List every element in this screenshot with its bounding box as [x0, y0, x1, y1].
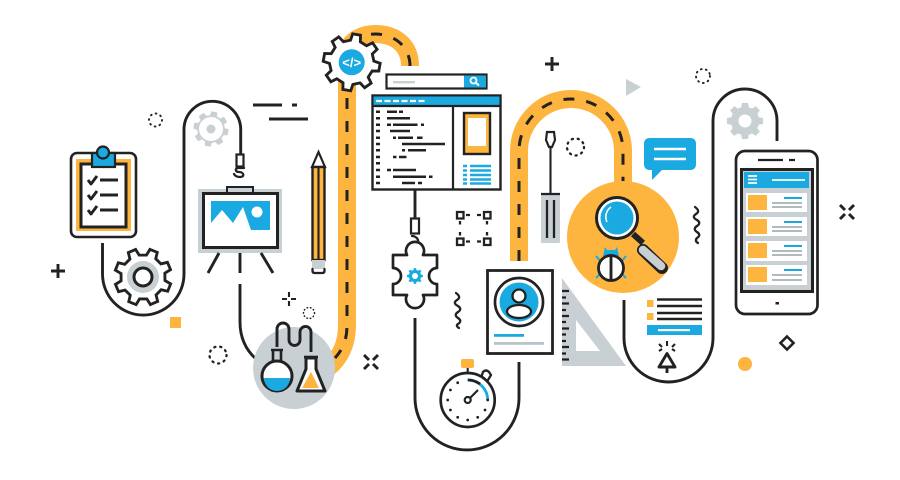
- decorative marks: four-point sparkle: [282, 292, 296, 306]
- magnifying glass: [596, 198, 662, 268]
- motion lines: [253, 105, 308, 119]
- decorative marks: plus signs: [51, 57, 559, 278]
- bug: [596, 247, 626, 280]
- icon: developer cog with code symbol: [319, 30, 384, 95]
- small list block: [647, 300, 702, 335]
- mini device preview: [464, 113, 490, 154]
- icon: laboratory flasks: [253, 323, 335, 409]
- decorative marks: inward arrows x: [364, 205, 854, 369]
- connector line: right loop to phone: [624, 89, 777, 382]
- icon: set square ruler: [562, 278, 626, 366]
- smartphone: [736, 151, 818, 314]
- orange road: right: [519, 99, 623, 261]
- icon: grey cog: [191, 109, 231, 149]
- code editor window: [372, 96, 500, 190]
- icon: presentation easel: [198, 187, 282, 273]
- icon: cursor with click rays: [659, 341, 675, 373]
- decorative marks: dotted circles: [149, 69, 710, 364]
- magnifier and bug badge: [567, 181, 679, 293]
- code lines: [376, 112, 445, 183]
- connector line: clipboard to easel: [102, 101, 241, 315]
- screwdriver: [541, 132, 560, 243]
- hook above easel: [234, 154, 244, 177]
- selection frame icon: [457, 212, 490, 245]
- profile card: [488, 270, 552, 354]
- decorative marks: diamond: [780, 336, 794, 350]
- squiggle: [455, 293, 460, 328]
- squiggle right: [694, 207, 699, 243]
- icon: stopwatch: [441, 359, 495, 427]
- connector: editor to puzzle hook: [411, 190, 419, 243]
- decorative marks: orange square: [170, 317, 181, 328]
- icon: solid grey cog: [728, 104, 762, 138]
- chat bubble: [644, 138, 696, 180]
- decorative marks: orange dot: [738, 357, 752, 371]
- icon: dark cog: [106, 240, 180, 314]
- icon: clipboard: [71, 146, 136, 237]
- phone list rows: [746, 193, 807, 285]
- decorative marks: grey triangle: [626, 79, 641, 96]
- icon: pencil: [312, 152, 325, 273]
- connector line: bottom loop under stopwatch: [415, 318, 519, 450]
- icon: puzzle piece with cog: [393, 242, 437, 308]
- icon: developer cog with code symbol: </>: [342, 55, 362, 70]
- search bar: [386, 74, 486, 88]
- orange road: left: [328, 34, 410, 368]
- connector line: easel to flask: [240, 284, 256, 359]
